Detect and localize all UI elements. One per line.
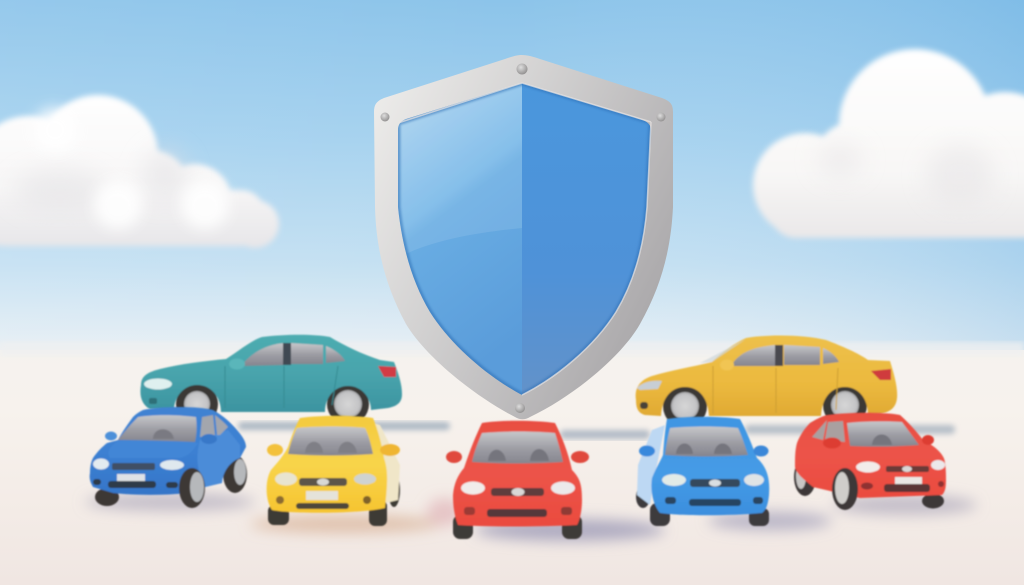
body xyxy=(90,407,246,495)
front wheel xyxy=(179,468,205,508)
hood highlight xyxy=(108,440,198,458)
wheels xyxy=(268,505,289,525)
shield: rivets xyxy=(380,64,666,413)
side panel xyxy=(637,425,665,505)
side windows xyxy=(200,415,215,437)
sky background xyxy=(0,0,1024,352)
shield: metal rim xyxy=(374,55,673,419)
body xyxy=(795,413,946,498)
body xyxy=(267,416,387,513)
car: blue hatchback, front left xyxy=(90,407,247,508)
front wheel xyxy=(832,468,858,510)
shadows under the front row xyxy=(85,493,977,541)
wheels xyxy=(636,486,650,508)
body xyxy=(140,335,402,412)
wheels xyxy=(453,515,473,539)
shield xyxy=(374,55,673,419)
body xyxy=(651,417,769,515)
wheels xyxy=(176,383,218,425)
body xyxy=(636,336,897,416)
wheels xyxy=(922,494,944,508)
car: yellow sedan, back right xyxy=(636,336,897,428)
wheels xyxy=(663,384,707,428)
side panel xyxy=(365,420,400,503)
cloud: right xyxy=(753,49,1024,238)
side panel shading xyxy=(197,430,240,487)
shield: inner bevel highlight xyxy=(398,83,651,395)
shield: blue inner panel xyxy=(398,83,651,395)
car: red hatchback, front right corner xyxy=(794,413,946,510)
car: teal sedan, back left xyxy=(140,335,402,425)
body xyxy=(453,421,582,526)
cloud: left xyxy=(0,95,279,248)
shadows behind the back row xyxy=(0,422,955,439)
rear and near-side wheels xyxy=(95,488,119,506)
car: blue hatchback, front right xyxy=(636,417,769,526)
car: red hatchback, front centre xyxy=(446,421,589,539)
windshield xyxy=(118,415,197,442)
horizon blend xyxy=(0,342,1024,356)
car: yellow hatchback, front xyxy=(267,416,400,526)
ground plane xyxy=(0,350,1024,585)
